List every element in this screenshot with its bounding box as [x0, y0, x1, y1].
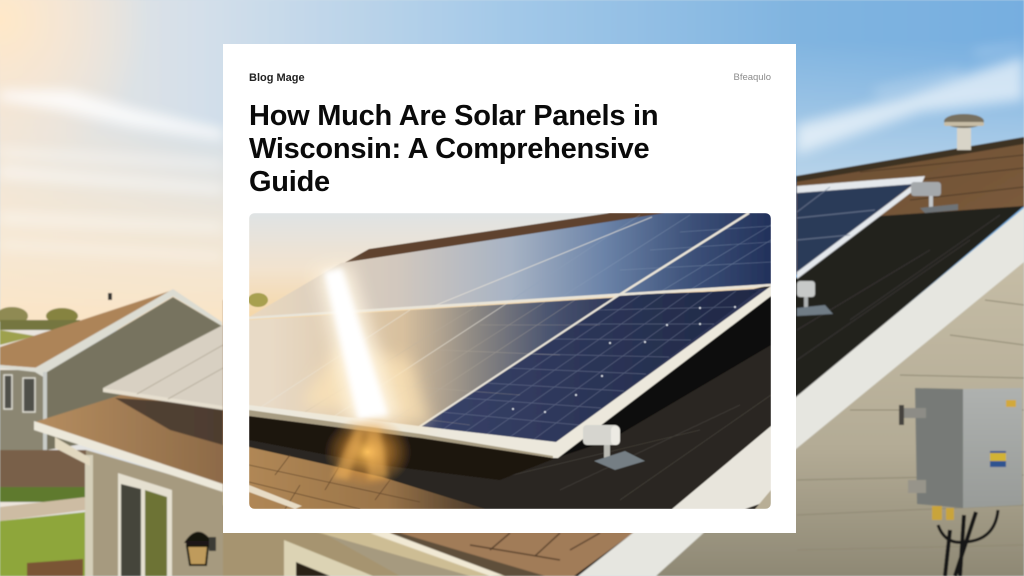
mounting bracket: [583, 425, 645, 470]
white article card: [223, 44, 796, 533]
roof shingles in shade: [500, 340, 771, 500]
sky: [249, 213, 771, 323]
date label: Bfeaqulo: [733, 72, 771, 83]
cell highlights: [512, 306, 736, 413]
left solar panels: [103, 325, 223, 410]
title: Wisconsin: A Comprehensive: [249, 133, 649, 165]
panel frame dividers: [249, 213, 771, 427]
wall lamp: [184, 532, 216, 565]
far house: [0, 289, 222, 450]
hero photo: solar panels on shingle roof: [249, 213, 771, 509]
right dark shingle roof: [790, 206, 1024, 404]
shingle roof in shade: [249, 285, 771, 509]
distant trees and hill: [0, 307, 80, 345]
title: [249, 100, 658, 198]
title: How Much Are Solar Panels in: [249, 100, 658, 132]
sunlit shingles: [249, 447, 485, 509]
clouds: [0, 42, 1024, 262]
roof vent: [944, 114, 984, 150]
title: Guide: [249, 166, 330, 198]
sun reflection: [300, 265, 430, 425]
lower row panels: [249, 288, 771, 446]
middle panel grid: [300, 300, 600, 425]
panel mounting brackets: [797, 182, 958, 316]
near house wall: [55, 437, 540, 576]
sun glow rays: [324, 416, 412, 488]
right upper roof: [796, 137, 1024, 275]
dark panel: [419, 290, 759, 442]
white fascia: [672, 426, 771, 509]
shingle lines: [249, 455, 420, 509]
front panel frame: [249, 286, 771, 458]
back roof ridge: [344, 213, 670, 263]
right wall with siding: [640, 255, 1024, 576]
top row panels: [249, 213, 771, 317]
tree: [248, 293, 268, 307]
top panel grid: [510, 215, 771, 301]
electrical box: [899, 388, 1022, 576]
blog name: Blog Mage: [249, 72, 305, 84]
dark panel cell grid: [441, 291, 736, 440]
black shadow under panels: [556, 296, 771, 458]
white fascia board: [578, 208, 1024, 576]
right solar panel: [797, 176, 925, 279]
fence, lawn and road: [0, 450, 86, 576]
near roof, left side: [34, 300, 771, 576]
gutter: [249, 485, 302, 509]
